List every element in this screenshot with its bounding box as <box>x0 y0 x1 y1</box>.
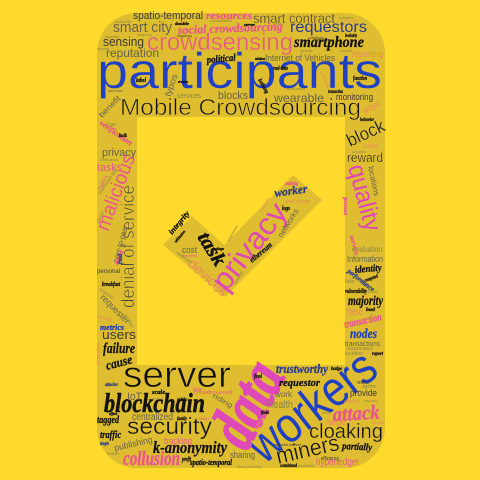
word cloud: right column: reward <box>347 150 383 165</box>
word cloud: bottom band: network <box>357 380 369 386</box>
word cloud: right column: majority <box>348 294 384 309</box>
word cloud: check mark: utilization <box>173 228 187 244</box>
word cloud: check mark: prevalent <box>182 253 198 258</box>
word cloud: check mark: cost <box>182 245 197 255</box>
word cloud: top band: real-time <box>273 66 288 72</box>
word cloud: top band: monitoring <box>336 92 373 102</box>
word cloud: check mark: worker <box>273 181 308 200</box>
word cloud: bottom band: flood <box>254 374 263 380</box>
word cloud: left column: regions <box>97 174 110 191</box>
word cloud: bottom band: cons <box>322 410 331 415</box>
word cloud: check mark: logs <box>282 206 291 212</box>
word cloud: bottom band: traffic <box>100 429 121 441</box>
word cloud: check mark: incentive <box>226 224 239 242</box>
word cloud: right column: vulnerability <box>345 289 367 295</box>
word cloud: top band: blocks <box>218 90 248 102</box>
word cloud: right column: locations <box>366 166 381 197</box>
word cloud: bottom band: efficiency <box>321 456 339 462</box>
word cloud: top band: function <box>353 76 367 82</box>
word cloud: bottom band: collusion <box>123 448 180 470</box>
word cloud: top band: solutions <box>254 56 265 61</box>
word: blockchain: blockchain <box>104 388 205 418</box>
word cloud: top band: reporting <box>352 49 383 59</box>
word cloud: top band: smart contract <box>253 10 335 26</box>
word cloud: bottom band: spatio-temporal <box>189 458 233 467</box>
word cloud: right column: performance <box>345 267 376 293</box>
word cloud: check mark: mobile <box>259 195 271 212</box>
word cloud: top band: requestors <box>290 19 367 36</box>
word cloud: left column: mining <box>114 250 125 266</box>
word cloud: right column <box>342 115 389 357</box>
word cloud: bottom band: attacker <box>105 383 118 388</box>
word cloud: top band: smartphone <box>293 34 364 51</box>
word cloud: bottom band: badge <box>331 367 343 372</box>
word cloud: bottom band: sharing <box>230 450 255 460</box>
word: miners: miners <box>273 429 341 469</box>
word cloud: bottom band: public <box>176 398 188 403</box>
word cloud: right column: identity <box>354 263 383 276</box>
word cloud: right column: loss <box>368 289 379 295</box>
word cloud: left column: dishonest <box>96 314 113 324</box>
word cloud: bottom band: fraud <box>153 396 163 401</box>
word cloud: left column: users <box>102 327 137 342</box>
word cloud: check mark: applied <box>214 288 227 293</box>
word cloud: bottom band: response <box>364 398 378 403</box>
word cloud: check mark: integrity <box>167 209 192 236</box>
word cloud: left column: privacy <box>102 147 136 159</box>
word cloud: left column: failure <box>103 341 135 357</box>
word cloud: bottom band: simple <box>99 442 110 447</box>
word cloud: top band: economic <box>344 18 358 23</box>
word cloud: right column: transactions <box>345 341 380 348</box>
word: workers: workers <box>236 338 387 474</box>
word cloud: left column: metrics <box>100 323 124 332</box>
word cloud: bottom band: glide <box>193 387 202 393</box>
word: Mobile Crowdsourcing: Mobile Crowdsourcing <box>120 94 361 120</box>
word: server: server <box>123 354 231 395</box>
word cloud: bottom band: work <box>274 390 293 399</box>
word cloud: bottom band: profit <box>181 457 191 463</box>
word cloud: top band: transaction <box>328 90 343 95</box>
word cloud: right column: location <box>345 351 363 357</box>
word cloud: left column: location <box>122 313 135 329</box>
word cloud: top band: smart city <box>113 19 172 36</box>
word cloud: right column: behavior <box>360 118 374 123</box>
word cloud: left column: breakfast <box>102 282 120 288</box>
word cloud: bottom band: k-anonymity <box>153 438 227 457</box>
word: cloaking: cloaking <box>309 421 383 443</box>
word cloud: bottom band: tracking <box>164 436 192 446</box>
word cloud: right column: false <box>347 307 363 318</box>
word cloud: left column: cause <box>104 351 134 373</box>
word cloud: top band: double <box>175 21 189 26</box>
word cloud: top band: services <box>177 93 201 100</box>
word cloud: top band: server <box>243 22 255 27</box>
word cloud: top band: lowdoubty <box>345 34 357 39</box>
word cloud: right column: crowd <box>343 196 349 215</box>
word cloud: top band: bitcoin <box>273 21 283 26</box>
word cloud: check mark: networks <box>276 207 301 239</box>
word cloud: bottom band: scale <box>151 390 165 396</box>
word cloud: bottom band: family <box>177 417 188 422</box>
word cloud: bottom band: attack <box>332 402 380 426</box>
word cloud: left column: personal <box>97 269 120 275</box>
word cloud: top band: even <box>178 79 189 84</box>
word cloud: bottom band: trustworthy <box>276 361 328 376</box>
word cloud: right column: bad <box>366 308 376 313</box>
word cloud: bottom band: requestor <box>279 377 321 389</box>
word cloud: bottom band: tagged <box>97 414 119 426</box>
word cloud: bottom band: privacy-preserving <box>237 464 261 469</box>
word cloud: bottom band: attacks <box>252 407 272 432</box>
word cloud: top band: trusted network <box>287 86 305 91</box>
word: malicious: malicious <box>92 151 140 234</box>
word: crowdsensing: crowdsensing <box>147 29 293 56</box>
word cloud: top band: reputation <box>106 46 159 60</box>
word cloud: check mark <box>167 181 310 299</box>
word cloud: left column: verification <box>98 118 135 148</box>
word cloud: bottom band: crowdsourced <box>194 390 232 396</box>
word cloud: left column: tasks <box>97 162 122 174</box>
word cloud: top band: spatial <box>185 57 196 62</box>
word: privacy: privacy <box>204 195 295 297</box>
word: security: security <box>127 413 213 439</box>
word cloud: top band: typos <box>162 72 180 98</box>
word cloud: bottom band: IoT <box>127 391 142 403</box>
word cloud: bottom band: finds <box>261 411 269 416</box>
word cloud: bottom band: offset <box>109 411 118 416</box>
word: participants: participants <box>97 43 382 99</box>
word: data: data <box>195 349 299 459</box>
word cloud: left column: fraud <box>118 253 124 264</box>
word cloud: bottom band: health <box>268 399 293 411</box>
word cloud: right column: report <box>372 352 384 357</box>
word cloud: top band: sensing <box>103 34 144 49</box>
word cloud: right column: nodes <box>350 327 377 342</box>
word cloud: right column: block <box>343 115 389 151</box>
word cloud: left column: contracts <box>100 157 118 162</box>
word cloud: right column: transaction <box>343 311 383 331</box>
word cloud: left column: incentive <box>96 343 102 365</box>
word cloud: bottom band: eliminating <box>344 399 359 405</box>
word cloud: check mark: ethereum <box>248 240 274 265</box>
word cloud: top band: deposits <box>97 46 109 51</box>
word cloud: top band: social crowdsourcing <box>177 19 283 37</box>
word cloud: bottom band: broker <box>107 451 120 456</box>
word cloud: top band: political <box>205 52 236 66</box>
word cloud: right column: Information <box>347 254 383 264</box>
word cloud: top band: spatio-temporal <box>133 10 203 22</box>
word cloud: top band: Internet of Vehicles <box>265 53 335 63</box>
word: denial of service: denial of service <box>118 185 138 308</box>
word cloud: right column: inspector-based <box>347 346 373 352</box>
word cloud: bottom band <box>97 338 387 474</box>
word: task: task <box>193 228 230 270</box>
word cloud: check mark: point of failure <box>286 199 310 205</box>
word cloud: left column: consensus <box>98 287 115 301</box>
word cloud: bottom band: centralized <box>132 412 173 423</box>
word cloud: top band: label <box>136 78 146 84</box>
word cloud: left column: requester <box>99 292 132 326</box>
word cloud: top band: microphones <box>137 32 152 37</box>
word cloud: top band: benefit <box>97 93 123 119</box>
word cloud: bottom band: algorithm <box>362 384 376 390</box>
word cloud: top band: generate <box>300 48 314 53</box>
word cloud: check mark: conflicting <box>285 182 298 187</box>
word cloud: top band: generation <box>108 88 123 93</box>
word cloud: top band: depending <box>105 34 119 39</box>
word cloud: bottom band: combined <box>280 464 297 469</box>
word cloud: bottom band: large <box>327 417 346 427</box>
word cloud: left column <box>92 118 140 373</box>
word cloud: right column: service <box>348 234 359 256</box>
word cloud: left column: crowdsourced data <box>97 168 119 196</box>
word cloud: bottom band: responsible-observers <box>274 442 301 447</box>
word cloud: check mark: challenges <box>175 250 193 264</box>
word cloud: top band: pays <box>362 98 382 115</box>
word cloud: bottom band: partially <box>341 441 373 454</box>
word cloud: left column: sidechain <box>95 210 106 225</box>
word: quality: quality <box>342 161 387 235</box>
word cloud: top band <box>97 10 383 120</box>
phone outline panel <box>97 13 385 468</box>
word cloud: top band: authority <box>115 19 131 24</box>
word cloud: top band: wearable <box>273 91 324 105</box>
word cloud: bottom band: capabilities <box>298 463 315 468</box>
word cloud: top band: vulnerabilities <box>210 18 232 23</box>
word cloud: right column: threats <box>364 144 378 150</box>
word cloud: bottom band: provide <box>350 388 377 398</box>
word cloud: right column: computed <box>364 274 379 284</box>
word cloud: right column: accuracy <box>352 149 366 154</box>
word cloud: top band: botbang <box>256 78 269 95</box>
word cloud: top band: scheduling <box>318 70 331 89</box>
word cloud: left column: bulk <box>119 134 127 139</box>
word cloud: left column: peer-to-peer <box>111 224 130 264</box>
word cloud: top band: cooperation <box>340 48 353 53</box>
word cloud: top band: transparency <box>177 33 192 38</box>
word cloud: left column: User <box>106 122 116 128</box>
word cloud: right column: evaluation <box>352 245 382 254</box>
word cloud: bottom band: hyperledger <box>316 457 360 468</box>
word cloud: check mark: leakage <box>213 246 224 251</box>
word cloud: bottom band: publishing <box>113 434 153 453</box>
word cloud: top band: resources <box>206 10 252 22</box>
word cloud: check mark: exchange <box>233 270 245 286</box>
check mark panel <box>163 175 322 297</box>
word cloud: top band: applications <box>339 15 353 20</box>
word cloud: right column: fake <box>345 279 355 285</box>
word cloud: bottom band: faster <box>199 416 210 421</box>
word cloud: bottom band: riding <box>211 393 234 410</box>
word cloud: top band: coalitions <box>308 35 324 40</box>
word: devices: devices <box>185 255 231 299</box>
word cloud: bottom band: expectation <box>371 420 385 425</box>
